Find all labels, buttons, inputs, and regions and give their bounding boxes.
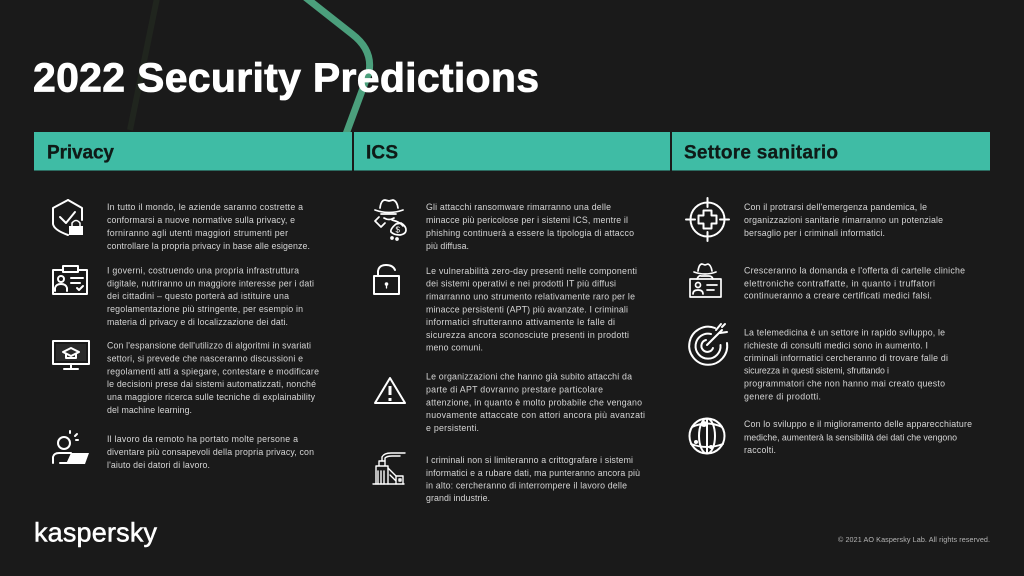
- text: ICS 1: Gli attacchi ransomware rimarranno una delle: [426, 202, 611, 212]
- text: sanitario 3: sicurezza in questi sistemi, sfruttando i: [744, 366, 889, 376]
- text: sanitario 2: [744, 266, 965, 301]
- text: sanitario 3: richieste di consulti medici sono in aumento. I: [744, 340, 928, 350]
- text: privacy 3: del machine learning.: [107, 405, 192, 415]
- text: ICS 1: più diffusa.: [426, 241, 469, 251]
- text: ICS 4: informatici e a rubare dati, ma punteranno ancora più: [426, 468, 640, 478]
- text: privacy 4: diventare più consapevoli della propria privacy, con: [107, 447, 314, 457]
- text: sanitario 4: mediche, aumenterà la sensibilità dei dati che vengono: [744, 432, 957, 442]
- text: sanitario 2: continueranno a creare certificati medici falsi.: [744, 291, 932, 301]
- text: ICS 3: parte di APT dovranno prestare particolare: [426, 385, 603, 395]
- text: ICS 1: [426, 202, 634, 251]
- icon: bullseye with arrow: [689, 324, 727, 365]
- header: ICS: ICS: [366, 142, 398, 164]
- text: privacy 1: controllare la propria privacy in base alle esigenze.: [107, 241, 310, 251]
- text: ICS 4: [426, 455, 640, 503]
- text: sanitario 1: bersaglio per i criminali informatici.: [744, 228, 885, 238]
- text: privacy 4: l'aiuto dei datori di lavoro.: [107, 460, 210, 470]
- text: ICS 4: I criminali non si limiteranno a crittografare i sistemi: [426, 455, 633, 465]
- text: privacy 2: regolamentazione più stringente, per esempio in: [107, 304, 303, 314]
- text: privacy 3: [107, 341, 319, 415]
- text: sanitario 3: genere di prodotti.: [744, 392, 821, 402]
- text: privacy 4: [107, 434, 314, 470]
- header: Privacy: [34, 132, 352, 170]
- text: sanitario 1: Con il protrarsi dell'emergenza pandemica, le: [744, 202, 927, 212]
- text: privacy 1: conformarsi a nuove normative sulla privacy, e: [107, 215, 295, 225]
- text: privacy 3: una maggiore ricerca sulle tecniche di explainability: [107, 392, 316, 402]
- text: ICS 4: in alto: cercheranno di interrompere il lavoro delle: [426, 481, 627, 491]
- text: ICS 3: Le organizzazioni che hanno già subito attacchi da: [426, 372, 632, 382]
- text: sanitario 4: [744, 419, 972, 455]
- text: privacy 3: regolamenti atti a spiegare, contestare e modificare: [107, 366, 319, 376]
- text: privacy 3: settori, si prevede che nasceranno discussioni e: [107, 354, 303, 364]
- text: ICS 2: sicurezza ancora sconosciute presenti in prodotti: [426, 330, 629, 340]
- text: ICS 1: minacce più pericolose per i sistemi ICS, mentre il: [426, 215, 628, 225]
- text: ICS 2: [426, 266, 637, 352]
- copyright: © 2021 AO Kaspersky Lab. All rights reserved.: [838, 535, 990, 544]
- text: ICS 3: nuovamente attaccate con attori ancora più avanzati: [426, 410, 645, 420]
- text: privacy 1: [107, 202, 310, 251]
- text: ICS 2: Le vulnerabilità zero-day presenti nelle componenti: [426, 266, 637, 276]
- icon: open padlock: [374, 265, 399, 294]
- text: ICS 2: meno comuni.: [426, 342, 483, 352]
- icon: hacker with ransom money bag: [375, 200, 406, 240]
- icon: monitor with graduation cap: [53, 341, 89, 369]
- icon: person with laptop: [53, 431, 89, 464]
- text: ICS 3: [426, 372, 645, 433]
- text: sanitario 3: [744, 328, 948, 402]
- text: privacy 2: dei cittadini – questo porterà ad istituire una: [107, 291, 289, 301]
- text: ICS 2: minacce persistenti (APT) più avanzate. I criminali: [426, 304, 628, 314]
- text: privacy 2: materia di privacy e di localizzazione dei dati.: [107, 317, 288, 327]
- text: privacy 1: In tutto il mondo, le aziende saranno costrette a: [107, 202, 303, 212]
- text: privacy 4: Il lavoro da remoto ha portato molte persone a: [107, 434, 298, 444]
- icon: factory: [373, 453, 405, 484]
- icon: shield with lock: [53, 200, 83, 235]
- header: Settore sanitario: Settore sanitario: [684, 142, 838, 164]
- text: privacy 2: digitale, nutriranno un maggiore interesse per i dati: [107, 278, 314, 288]
- icon: warning triangle: [375, 378, 405, 403]
- icon: globe network: [690, 418, 724, 454]
- text: ICS 3: attenzione, in quanto è molto probabile che vengano: [426, 397, 642, 407]
- text: sanitario 3: criminali informatici cercheranno di trovare falle di: [744, 353, 948, 363]
- text: sanitario 4: raccolti.: [744, 445, 776, 455]
- text: privacy 1: forniranno agli utenti maggiori strumenti per: [107, 228, 288, 238]
- text: ICS 2: informatici sfrutteranno attivamente le falle di: [426, 317, 615, 327]
- icon: hacker with ransom money bag: $: [396, 226, 400, 234]
- text: privacy 3: le decisioni prese dai sistemi automatizzati, nonché: [107, 379, 316, 389]
- text: privacy 3: Con l'espansione dell'utilizzo di algoritmi in svariati: [107, 341, 311, 351]
- text: ICS 3: e persistenti.: [426, 423, 479, 433]
- text: sanitario 3: programmatori che non hanno mai creato questo: [744, 378, 945, 388]
- header: ICS: [354, 132, 670, 170]
- text: ICS 2: dei sistemi operativi e nei prodotti IT più diffusi: [426, 278, 616, 288]
- text: ICS 1: phishing continuerà a essere la tipologia di attacco: [426, 228, 634, 238]
- header: Settore sanitario: [672, 132, 990, 170]
- text: ICS 4: grandi industrie.: [426, 493, 490, 503]
- header: Privacy: Privacy: [47, 142, 114, 164]
- text: privacy 2: I governi, costruendo una propria infrastruttura: [107, 266, 299, 276]
- icon: clipboard ID card: [53, 266, 87, 294]
- icon: hacker with ID card: [690, 264, 721, 297]
- background hexagon outline: [130, 0, 370, 134]
- text: sanitario 1: organizzazioni sanitarie rimarranno un potenziale: [744, 215, 943, 225]
- text: sanitario 1: [744, 202, 943, 238]
- text: privacy 2: [107, 266, 314, 327]
- text: sanitario 2: elettroniche contraffatte, in quanto i truffatori: [744, 278, 935, 288]
- logo: kaspersky: kaspersky: [34, 518, 158, 548]
- text: sanitario 2: Cresceranno la domanda e l'offerta di cartelle cliniche: [744, 266, 965, 276]
- text: sanitario 4: Con lo sviluppo e il miglioramento delle apparecchiature: [744, 419, 972, 429]
- text: sanitario 3: La telemedicina è un settore in rapido sviluppo, le: [744, 328, 945, 338]
- text: ICS 2: rimarranno uno strumento relativamente raro per le: [426, 292, 635, 302]
- title: 2022 Security Predictions: [33, 54, 539, 100]
- icon: medical cross in crosshair: [686, 198, 729, 241]
